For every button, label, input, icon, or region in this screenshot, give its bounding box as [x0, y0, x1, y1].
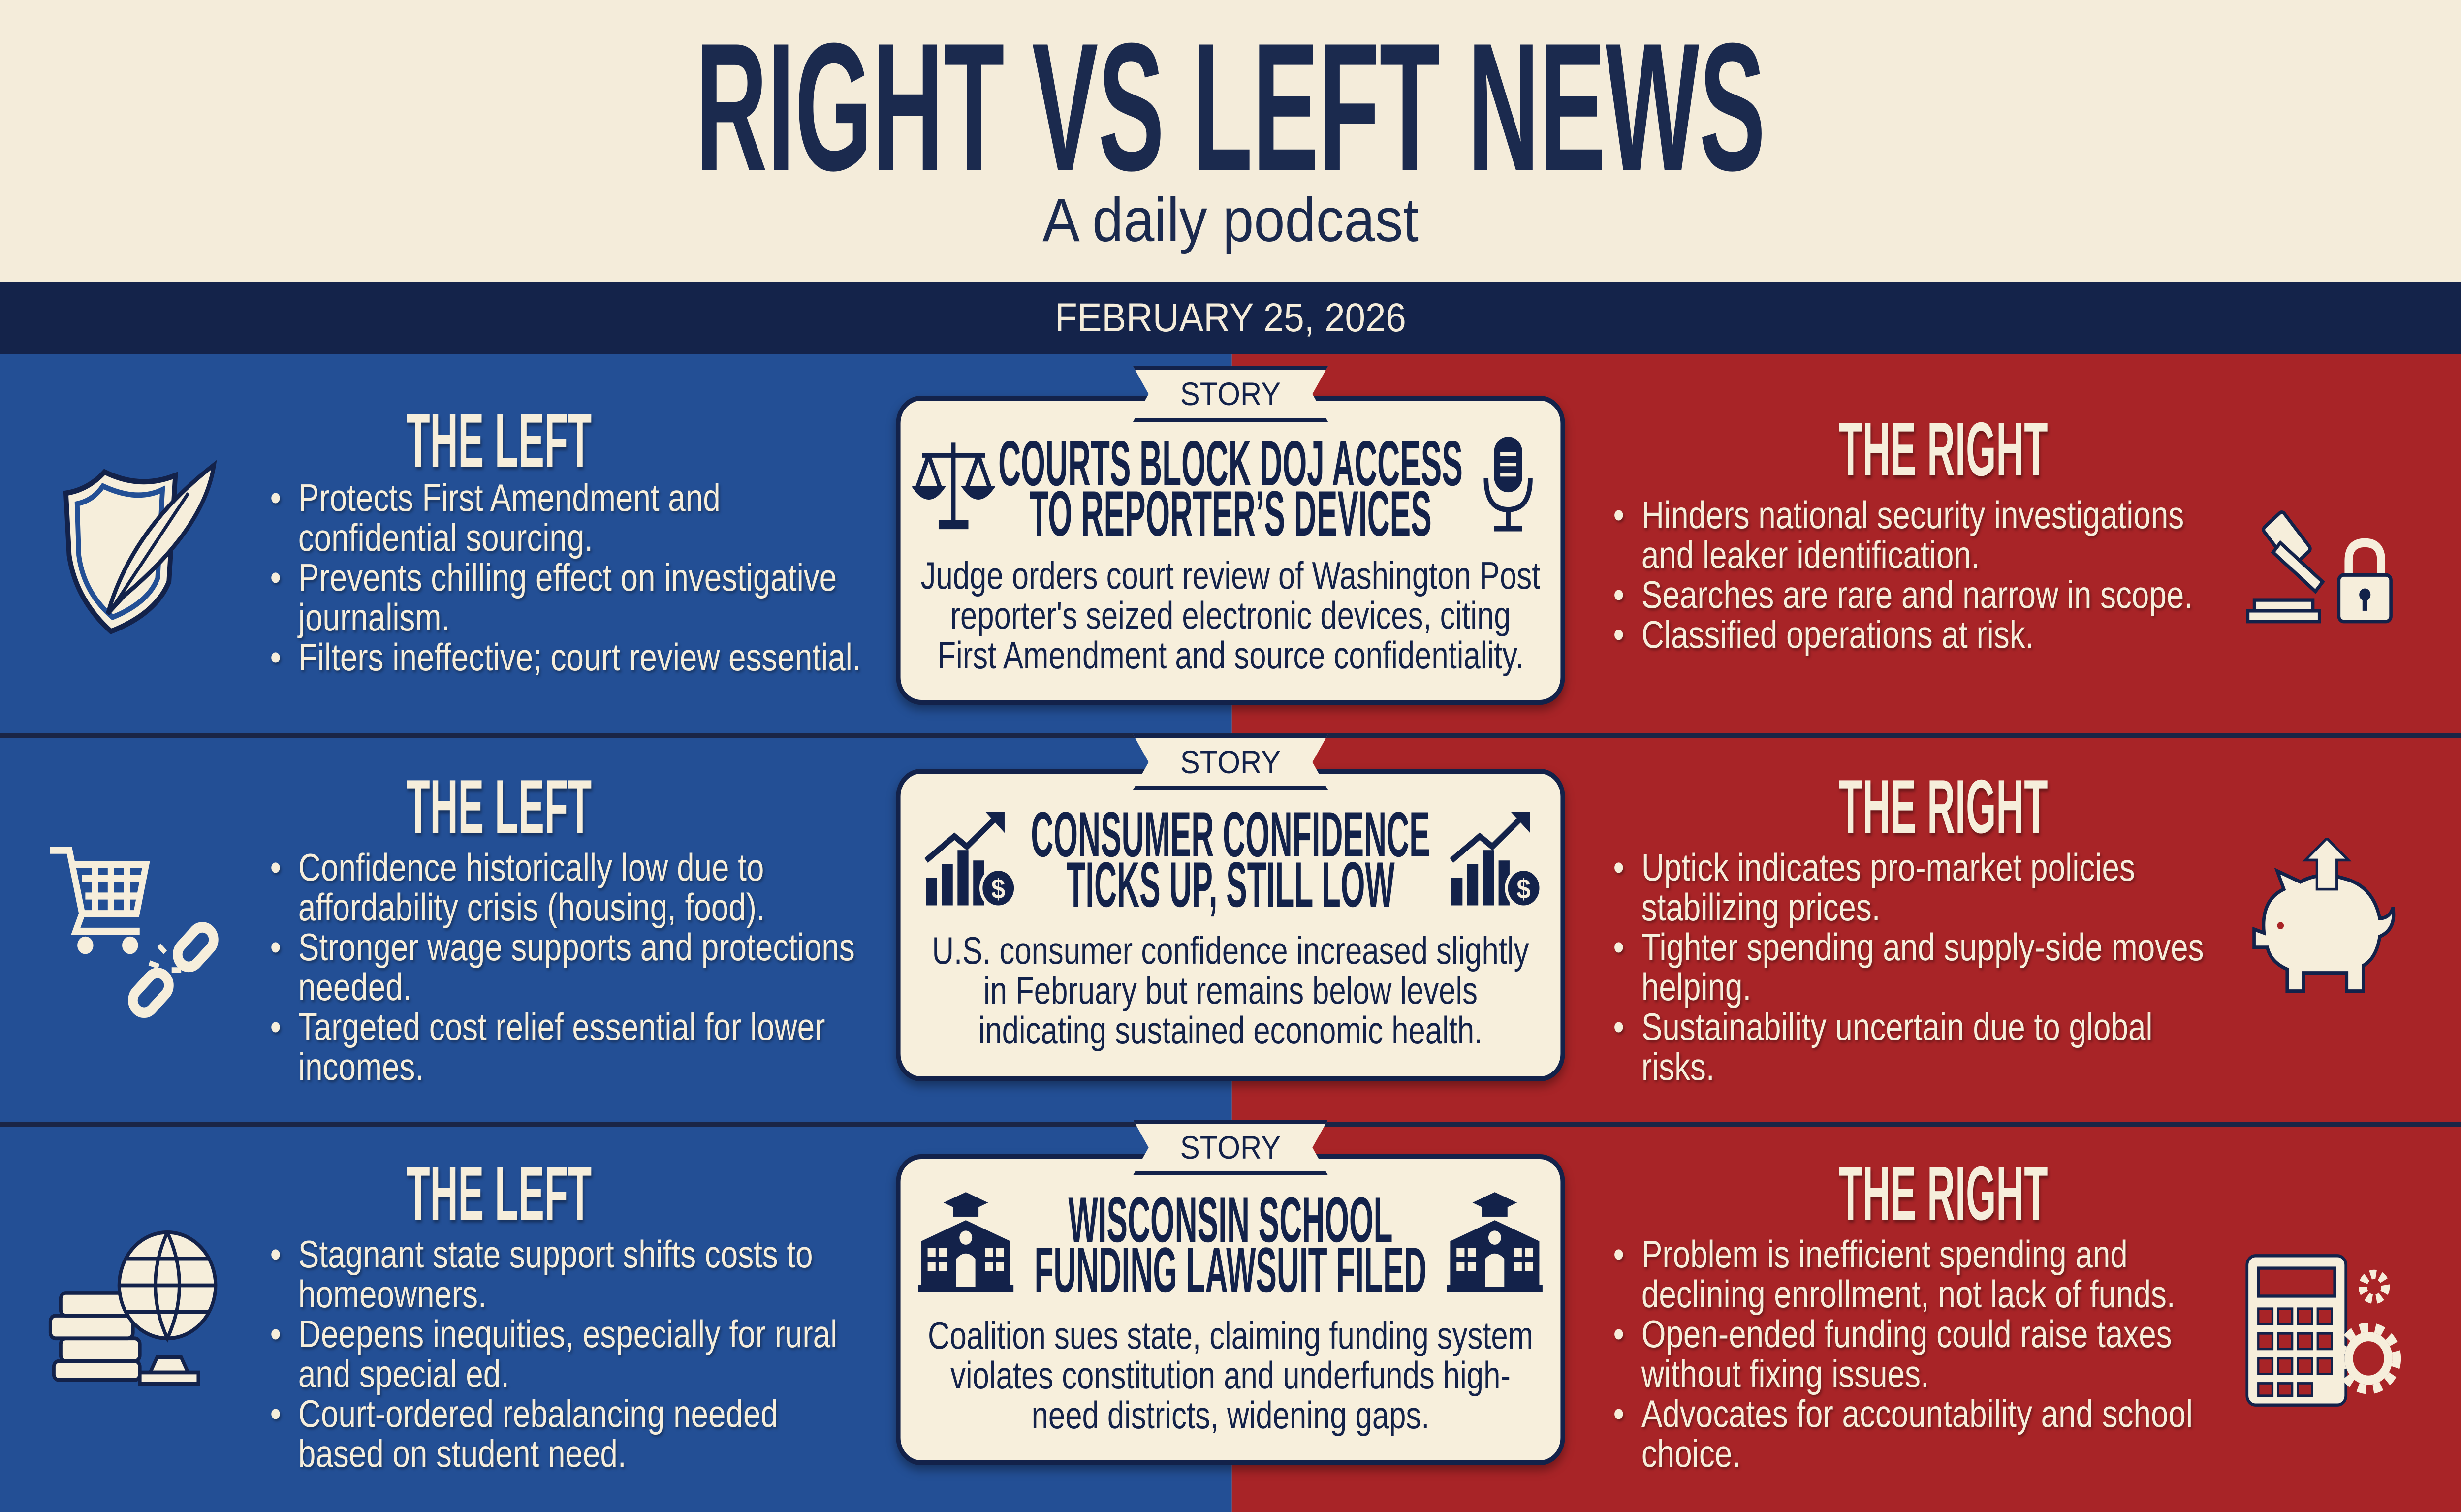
card body 1: Judge orders court review of Washington Post	[921, 554, 1540, 597]
icon: scales	[912, 442, 995, 530]
icon: gavel and lock	[2246, 510, 2393, 623]
card title 2	[1031, 798, 1430, 920]
title: RIGHT VS LEFT NEWS	[695, 5, 1766, 209]
bullets: right row 1: Hinders national security investigations	[1641, 493, 2184, 536]
bullets: right row 3	[1613, 1234, 2193, 1474]
left side background	[0, 354, 1232, 1512]
bullets: left row 2: needed.	[298, 965, 411, 1008]
heading: the left row 3: THE LEFT	[406, 1151, 592, 1236]
bullets: left row 1	[271, 476, 861, 679]
story tab row 3: STORY	[1180, 1129, 1281, 1166]
icon: shield with quill	[63, 460, 217, 634]
bullets: right row 2	[1614, 846, 2205, 1088]
bullets: left row 3: based on student need.	[298, 1432, 627, 1475]
right side background	[1232, 354, 2461, 1512]
icon: cart and broken chain	[50, 847, 219, 1018]
heading: the right row 1: THE RIGHT	[1839, 407, 2048, 492]
header background	[0, 0, 2461, 282]
bullets: left row 2: affordability crisis (housing, food).	[298, 885, 765, 929]
bullets: right row 2: helping.	[1641, 965, 1751, 1008]
bullets: left row 1: Prevents chilling effect on investigative	[298, 556, 837, 599]
card body 2: U.S. consumer confidence increased slightly	[932, 929, 1529, 972]
card body 2	[932, 929, 1529, 1052]
bullets: right row 3: choice.	[1641, 1432, 1741, 1475]
bullets: right row 1: Classified operations at risk.	[1641, 613, 2034, 656]
bullets: right row 3: declining enrollment, not lack of funds.	[1641, 1272, 2176, 1316]
bullets: left row 1: Protects First Amendment and	[298, 476, 721, 519]
icon: chart with dollar left: $	[991, 874, 1006, 905]
icon: school right	[1447, 1189, 1543, 1292]
icon: microphone	[1483, 437, 1533, 532]
bullets: left row 3: Deepens inequities, especially for rural	[298, 1312, 837, 1355]
card body 2: indicating sustained economic health.	[978, 1008, 1483, 1052]
card: story 3	[896, 1154, 1565, 1465]
bullets: right row 1: Searches are rare and narrow in scope.	[1641, 573, 2193, 616]
card title 3: FUNDING LAWSUIT FILED	[1034, 1234, 1427, 1306]
bullets: right row 3: Open-ended funding could raise taxes	[1641, 1312, 2172, 1355]
icon: chart with dollar right	[1450, 812, 1540, 906]
bullets: right row 3: Advocates for accountability and school	[1641, 1392, 2193, 1435]
bullets: left row 3: Court-ordered rebalancing needed	[298, 1392, 778, 1435]
bullets: left row 1: journalism.	[298, 596, 450, 639]
card title 1: COURTS BLOCK DOJ ACCESS	[998, 427, 1463, 499]
heading: the right row 3: THE RIGHT	[1839, 1151, 2048, 1236]
bullets: left row 3: homeowners.	[298, 1272, 487, 1316]
bullets: left row 2: Confidence historically low due to	[298, 846, 764, 889]
card body 1	[921, 554, 1540, 677]
bullets: right row 3: Problem is inefficient spending and	[1641, 1232, 2128, 1276]
card title 3: WISCONSIN SCHOOL	[1069, 1184, 1392, 1256]
bullets: right row 1: and leaker identification.	[1641, 533, 1980, 576]
bullets: right row 2: stabilizing prices.	[1641, 885, 1880, 929]
bullets: left row 1: Filters ineffective; court review essential.	[298, 635, 861, 679]
bullets: right row 2: Tighter spending and supply-side moves	[1641, 925, 2204, 969]
card title 3	[965, 1195, 1496, 1295]
bullets: left row 3	[270, 1234, 837, 1474]
card body 1: First Amendment and source confidentiality.	[937, 633, 1524, 677]
icon: chart with dollar right: $	[1516, 874, 1531, 905]
story tab row 3	[1133, 1120, 1328, 1175]
heading: the left row 2: THE LEFT	[406, 764, 592, 849]
card: story 2	[896, 769, 1565, 1081]
icon: school left	[918, 1189, 1013, 1292]
bullets: right row 2: Uptick indicates pro-market policies	[1641, 846, 2135, 889]
icon: chart with dollar left	[924, 812, 1014, 906]
card body 2: in February but remains below levels	[983, 969, 1478, 1012]
icon: books and globe	[47, 1209, 227, 1399]
subtitle: A daily podcast	[1042, 186, 1419, 254]
card body 1: reporter's seized electronic devices, citing	[950, 594, 1511, 637]
date bar: FEBRUARY 25, 2026	[1055, 295, 1406, 340]
card body 3: need districts, widening gaps.	[1032, 1393, 1429, 1437]
story tab row 1: STORY	[1180, 376, 1281, 412]
bullets: left row 3: Stagnant state support shifts costs to	[298, 1232, 813, 1276]
bullets: left row 3: and special ed.	[298, 1352, 509, 1395]
bullets: right row 1	[1614, 493, 2193, 659]
card body 3: Coalition sues state, claiming funding system	[928, 1314, 1533, 1357]
date bar	[0, 282, 2461, 354]
story tab row 1	[1133, 366, 1328, 422]
bullets: right row 2: Sustainability uncertain due to global	[1641, 1005, 2153, 1048]
card title 2: TICKS UP, STILL LOW	[1066, 849, 1395, 920]
card title 2: CONSUMER CONFIDENCE	[1031, 798, 1430, 870]
heading: the left row 1: THE LEFT	[406, 398, 592, 483]
bullets: left row 2: Targeted cost relief essential for lower	[298, 1005, 825, 1048]
bullets: right row 3: without fixing issues.	[1641, 1352, 1929, 1395]
heading: the right row 2: THE RIGHT	[1839, 764, 2048, 849]
story tab row 2	[1133, 734, 1328, 790]
bullets: right row 2: risks.	[1641, 1045, 1715, 1088]
icon: calculator and gears	[2244, 1253, 2401, 1408]
icon: piggy bank with arrow	[2244, 838, 2398, 1020]
bullets: left row 2: incomes.	[298, 1045, 424, 1088]
card title 1: TO REPORTER’S DEVICES	[1029, 477, 1432, 549]
card title 1	[998, 427, 1463, 549]
card: story 1	[896, 396, 1565, 705]
bullets: left row 1: confidential sourcing.	[298, 516, 593, 559]
bullets: left row 2	[271, 846, 856, 1088]
card body 3: violates constitution and underfunds high-	[950, 1354, 1511, 1397]
card body 3	[881, 1316, 1580, 1435]
story tab row 2: STORY	[1180, 744, 1281, 780]
bullets: left row 2: Stronger wage supports and protections	[298, 925, 855, 969]
